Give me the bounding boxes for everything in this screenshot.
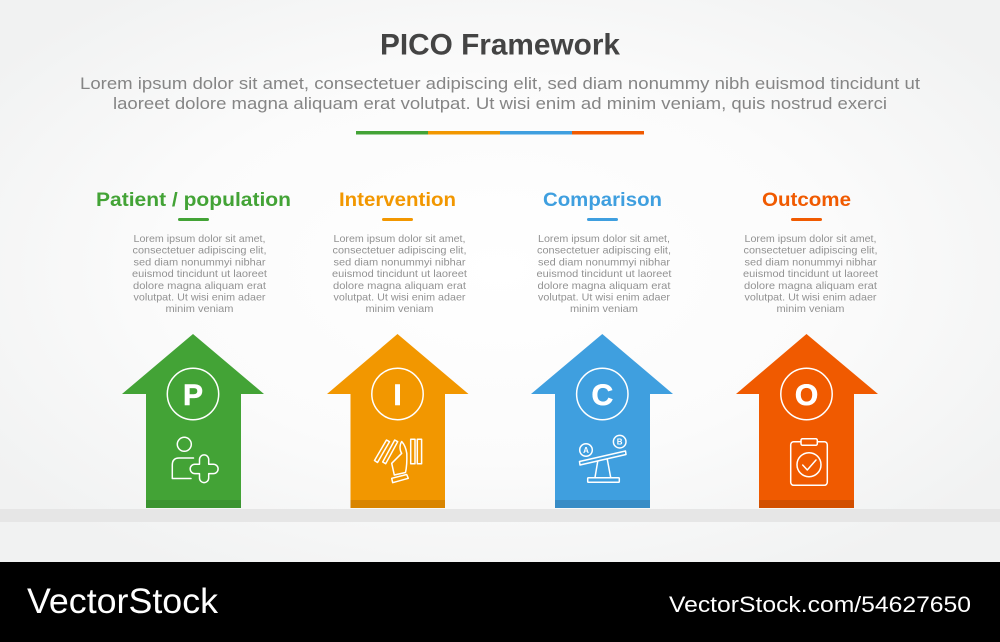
body text: volutpat. Ut wisi enim adaer [334,292,466,304]
body text [332,234,467,315]
body text: volutpat. Ut wisi enim adaer [744,292,877,304]
icon: patient with medical cross [172,437,218,483]
body text [743,234,878,315]
heading: outcome: Outcome [762,190,851,211]
body text: Lorem ipsum dolor sit amet, [334,234,466,245]
body text [536,234,672,315]
arrow: red-orange [736,334,878,508]
body text: Lorem ipsum dolor sit amet, [538,234,670,245]
body text: dolore magna aliquam erat [744,281,877,292]
icon: hand with falling dominoes [374,439,422,483]
icon: seesaw comparing A and B: B [617,438,623,447]
letter badge I [372,368,423,420]
body text: minim veniam [570,304,638,315]
icon: clipboard with check [791,439,827,485]
heading underline [587,218,618,221]
arrow: orange [327,334,468,508]
body text: sed diam nonummyi nibhar [134,257,266,268]
arrow base shade [759,500,854,508]
four-colour divider [356,131,644,134]
watermark logo text: VectorStock [27,582,219,621]
body text: sed diam nonummyi nibhar [334,257,466,268]
icon: seesaw comparing A and B: A [583,446,589,455]
letter badge P [167,368,219,420]
heading: patient / population: Patient / population [96,190,291,211]
body text: dolore magna aliquam erat [133,281,266,292]
arrow: green [122,334,264,508]
heading: intervention: Intervention [339,190,456,211]
title: PICO Framework [380,28,620,62]
heading underline [178,218,209,221]
body text: euismod tincidunt ut laoreet [132,269,267,280]
body text: consectetuer adipiscing elit, [332,246,466,257]
icon: seesaw comparing A and B [580,435,626,482]
body text: Lorem ipsum dolor sit amet, [744,234,876,245]
body text: euismod tincidunt ut laoreet [536,269,672,280]
body text: volutpat. Ut wisi enim adaer [538,292,671,304]
body text: sed diam nonummyi nibhar [538,257,671,268]
watermark url text: VectorStock.com/54627650 [669,592,971,617]
body text: volutpat. Ut wisi enim adaer [134,292,266,304]
panel: intervention [327,190,468,508]
arrow base shade [146,500,241,508]
body text: minim veniam [776,304,844,315]
body text: dolore magna aliquam erat [333,281,466,292]
body text: consectetuer adipiscing elit, [537,246,671,257]
watermark bar [0,562,1000,642]
body text: euismod tincidunt ut laoreet [332,269,467,280]
panel: patient / population [96,190,291,508]
letter badge C: C [591,379,613,412]
arrow base shade [350,500,445,508]
panel: comparison [531,190,673,508]
heading underline [382,218,413,221]
heading underline [791,218,822,221]
subtitle text: laoreet dolore magna aliquam erat volutpat. Ut wisi enim ad minim veniam, quis nostrud exerci [113,94,887,113]
body text: dolore magna aliquam erat [538,281,671,292]
panel: outcome [736,190,878,508]
heading: comparison: Comparison [543,190,662,211]
body text: minim veniam [166,304,234,315]
body text: consectetuer adipiscing elit, [744,246,878,257]
arrow base shade [555,500,650,508]
body text: consectetuer adipiscing elit, [132,246,266,257]
body text: Lorem ipsum dolor sit amet, [134,234,266,245]
letter badge C [577,368,628,420]
subtitle text: Lorem ipsum dolor sit amet, consectetuer adipiscing elit, sed diam nonummy nibh euismod tincidunt ut [80,74,920,93]
body text: minim veniam [366,304,434,315]
subtitle text [80,74,920,113]
letter badge I: I [393,379,402,412]
letter badge O [781,368,832,420]
body text: sed diam nonummyi nibhar [744,257,877,268]
floor band [0,509,1000,522]
body text: euismod tincidunt ut laoreet [743,269,878,280]
arrow: blue [531,334,673,508]
letter badge P: P [183,379,203,412]
letter badge O: O [795,379,818,412]
body text [132,234,267,315]
